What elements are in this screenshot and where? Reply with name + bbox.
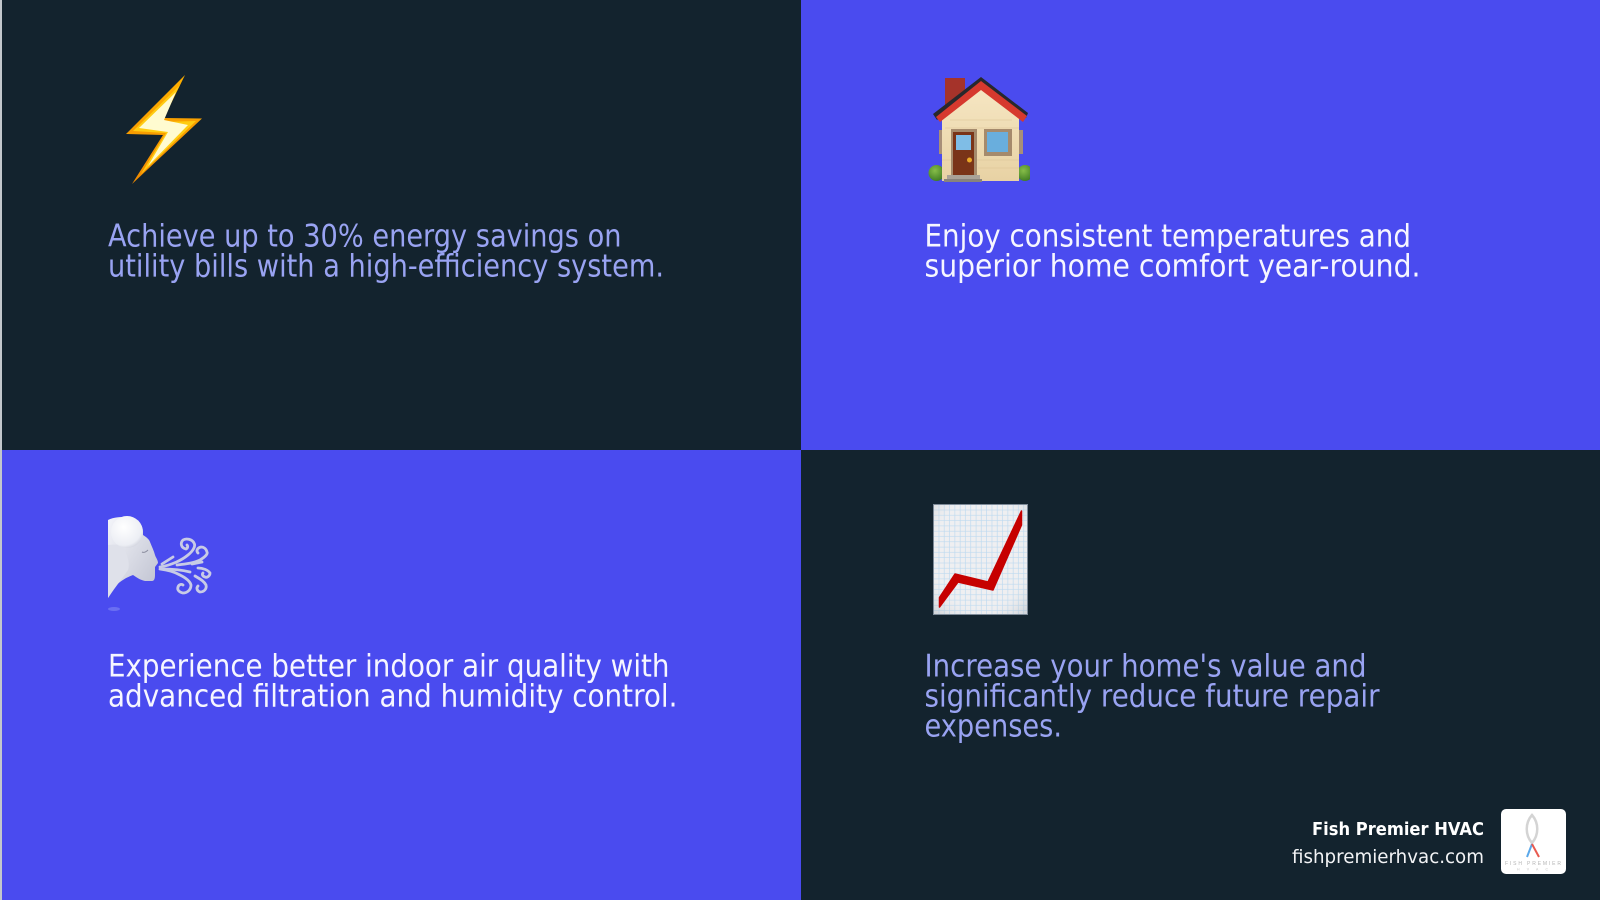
text: home value xyxy=(924,648,1380,744)
text: home comfort xyxy=(924,218,1420,284)
logo: HVAC xyxy=(1517,868,1548,872)
panel: home comfort xyxy=(801,0,1600,450)
text: air quality xyxy=(108,648,678,714)
logo: FISH PREMIER xyxy=(1505,861,1561,867)
brand footer xyxy=(1292,809,1566,874)
left edge strip xyxy=(0,0,2,900)
icon: house xyxy=(928,77,1030,182)
icon: lightning bolt xyxy=(126,75,202,184)
text: home comfort: superior home comfort year-round. xyxy=(924,248,1420,284)
text: home comfort: Enjoy consistent temperatures and xyxy=(924,218,1411,254)
text: home value: expenses. xyxy=(924,708,1062,744)
brand text xyxy=(1292,819,1484,868)
text: energy savings xyxy=(108,218,664,284)
text: home value: significantly reduce future repair xyxy=(924,678,1380,714)
text: home value: Increase your home's value and xyxy=(924,648,1366,684)
panel: energy savings xyxy=(2,0,801,450)
logo xyxy=(1501,809,1566,874)
icon: wind face xyxy=(108,516,212,611)
icon: chart xyxy=(933,504,1028,615)
text: energy savings: Achieve up to 30% energy savings on xyxy=(108,218,622,254)
panel: home value xyxy=(801,450,1600,900)
panel: air quality xyxy=(2,450,801,900)
